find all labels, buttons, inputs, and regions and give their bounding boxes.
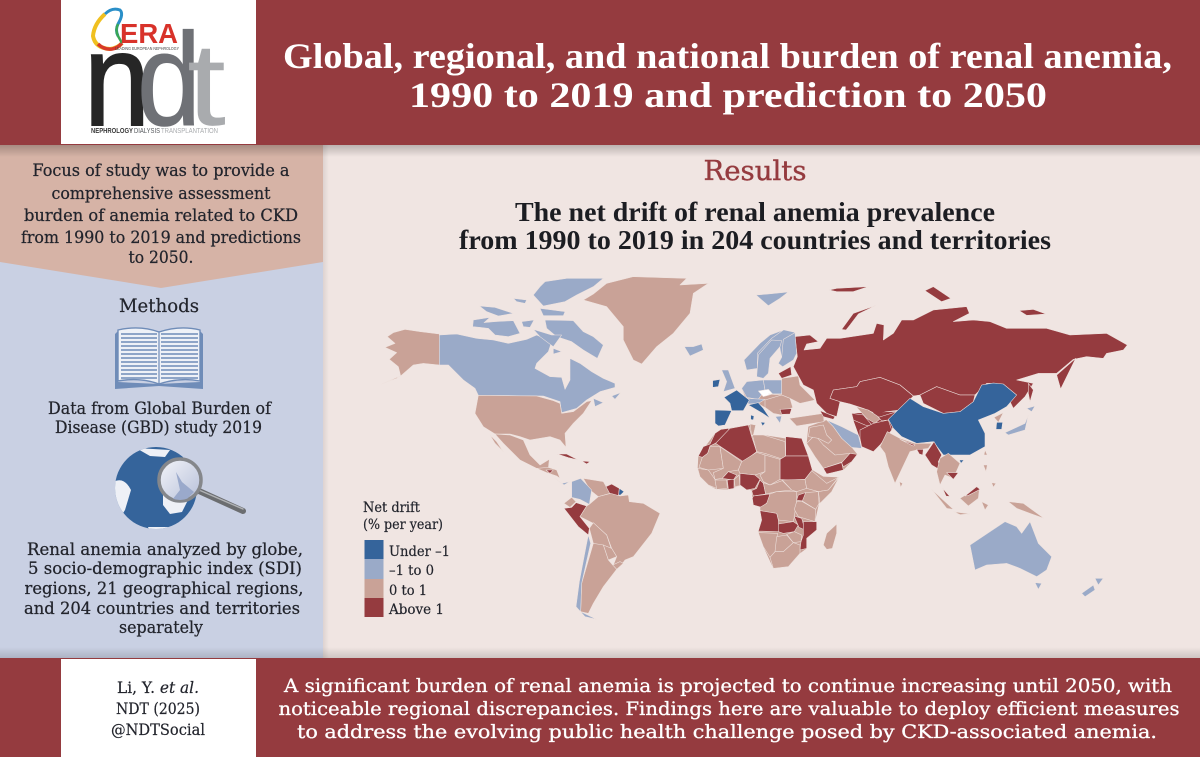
New Zealand bbox=[1082, 585, 1095, 597]
text: data source bbox=[48, 399, 273, 438]
logo: ERA NDT: t bbox=[187, 19, 226, 151]
heading: results: Results bbox=[704, 156, 806, 187]
choropleth map: Africa and Middle East bbox=[698, 420, 862, 568]
logo: ERA NDT: DIALYSIS bbox=[134, 128, 160, 135]
citation box bbox=[61, 659, 256, 757]
Kamchatka bbox=[1057, 358, 1076, 389]
choropleth map: southern and eastern Asia bbox=[852, 383, 1044, 518]
footer banner: A significant burden of renal anemia is projected to continue increasing until 2050, with bbox=[283, 675, 1172, 697]
Sumatra bbox=[932, 489, 953, 509]
icon: globe with magnifier bbox=[113, 447, 243, 532]
choropleth map: Central and South America, Greenland bbox=[475, 277, 708, 619]
Chile bbox=[576, 535, 597, 619]
Arctic islands bbox=[473, 317, 520, 337]
Czechia bbox=[758, 389, 773, 397]
Arabia base bbox=[807, 420, 857, 474]
South Africa bbox=[770, 543, 800, 568]
Borneo bbox=[960, 488, 979, 506]
Iran bbox=[827, 420, 862, 448]
Argentina bbox=[581, 543, 617, 613]
Bangladesh bbox=[917, 449, 923, 455]
choropleth map: North America bbox=[382, 278, 621, 413]
Zimbabwe bbox=[787, 532, 802, 543]
citation box: @NDTSocial bbox=[111, 720, 205, 739]
Hainan bbox=[959, 460, 964, 463]
text: analysis scope: separately bbox=[119, 618, 203, 638]
Ghana bbox=[727, 479, 734, 489]
Chad bbox=[760, 455, 780, 485]
Canada bbox=[439, 334, 615, 413]
Russia bbox=[793, 307, 1127, 417]
Belarus and Ukraine bbox=[768, 376, 815, 403]
Central America bbox=[537, 467, 560, 478]
text: data source: Data from Global Burden of bbox=[48, 399, 273, 419]
China bbox=[888, 383, 1017, 455]
panel: study focus bbox=[0, 145, 323, 288]
logo: ERA NDT: ERA bbox=[120, 18, 178, 49]
Uganda bbox=[797, 493, 806, 501]
chart title bbox=[459, 197, 1051, 255]
Mexico bbox=[495, 434, 549, 468]
Afghanistan and Pakistan bbox=[860, 420, 892, 452]
India bbox=[880, 432, 932, 483]
Paraguay and Uruguay bbox=[603, 545, 617, 560]
Cambodia bbox=[947, 473, 958, 479]
Brazil bbox=[580, 493, 660, 567]
Baltic states bbox=[778, 367, 792, 378]
Russian arctic islands bbox=[842, 305, 876, 330]
Myanmar bbox=[925, 442, 942, 470]
Sakhalin bbox=[1028, 383, 1033, 402]
panel: study focus: burden of anemia related to CKD bbox=[24, 206, 298, 226]
text: analysis scope: 5 socio-demographic index (SDI) bbox=[28, 559, 302, 579]
footer banner bbox=[0, 647, 1200, 757]
Guyana and Suriname bbox=[606, 484, 619, 497]
Iraq and Syria bbox=[808, 425, 832, 443]
Tanzania bbox=[794, 502, 816, 522]
text: analysis scope bbox=[24, 540, 304, 638]
Niger bbox=[738, 452, 765, 475]
logo: ERA NDT: LEADING EUROPEAN NEPHROLOGY bbox=[115, 46, 179, 51]
Balkans bbox=[765, 395, 793, 415]
choropleth map: Europe bbox=[713, 330, 835, 426]
Australia bbox=[970, 522, 1052, 577]
Saudi Arabia bbox=[807, 435, 850, 468]
panel: study focus: Focus of study was to provide a bbox=[32, 161, 290, 181]
Kenya bbox=[802, 492, 819, 509]
header banner: 1990 to 2019 and prediction to 2050 bbox=[409, 75, 1047, 115]
Norway bbox=[744, 330, 783, 370]
map legend: Under –1 bbox=[389, 544, 450, 560]
Yemen bbox=[823, 463, 843, 474]
logo: ERA NDT: d bbox=[137, 6, 201, 153]
New Guinea bbox=[1008, 502, 1044, 518]
North Korea bbox=[994, 413, 1003, 422]
Ivory Coast bbox=[715, 480, 727, 489]
map legend: Above 1 bbox=[388, 602, 444, 618]
Caribbean bbox=[557, 454, 578, 460]
panel: study focus: to 2050. bbox=[128, 248, 194, 268]
Bulgaria bbox=[780, 409, 792, 414]
header banner: Global, regional, and national burden of renal anemia, bbox=[283, 36, 1172, 76]
Namibia bbox=[758, 533, 778, 557]
Oman bbox=[842, 453, 857, 467]
citation box: Li, Y. et al. bbox=[117, 678, 199, 697]
footer banner: noticeable regional discrepancies. Findings here are valuable to deploy efficient measures bbox=[278, 698, 1180, 720]
United States bbox=[475, 395, 592, 447]
Philippines bbox=[983, 465, 987, 472]
Mozambique bbox=[800, 522, 817, 550]
Peru bbox=[564, 503, 589, 535]
text: analysis scope: regions, 21 geographical regions, bbox=[24, 579, 304, 599]
South Sudan bbox=[782, 479, 807, 492]
Sweden bbox=[757, 340, 782, 378]
Somalia bbox=[818, 477, 839, 503]
France bbox=[724, 390, 749, 411]
Nepal bbox=[900, 439, 915, 446]
text: analysis scope: and 204 countries and territories bbox=[24, 599, 300, 619]
Uzbekistan bbox=[856, 407, 881, 423]
United Kingdom bbox=[722, 370, 735, 392]
Indochina bbox=[937, 453, 960, 485]
icon: open book bbox=[115, 328, 203, 389]
Malay peninsula bbox=[943, 488, 950, 497]
Finland bbox=[778, 333, 797, 367]
Greenland bbox=[583, 277, 708, 364]
Egypt bbox=[786, 437, 808, 456]
Sudan bbox=[780, 456, 812, 480]
chart title: from 1990 to 2019 in 204 countries and territories bbox=[459, 225, 1051, 255]
Central and eastern Europe base bbox=[742, 376, 815, 415]
Caucasus bbox=[820, 411, 835, 419]
footer banner: to address the evolving public health challenge posed by CKD-associated anemia. bbox=[297, 721, 1157, 743]
Bolivia bbox=[589, 523, 612, 550]
Ireland bbox=[713, 379, 720, 387]
Mongolia bbox=[920, 387, 975, 413]
Germany bbox=[742, 380, 765, 399]
logo: ERA NDT: NEPHROLOGY bbox=[91, 128, 133, 135]
heading: methods: Methods bbox=[119, 296, 199, 317]
Libya bbox=[752, 435, 786, 460]
Turkey bbox=[789, 413, 824, 426]
Africa base bbox=[698, 425, 839, 568]
Mauritania bbox=[699, 447, 723, 470]
Alaska bbox=[385, 329, 439, 376]
text: analysis scope: Renal anemia analyzed by globe, bbox=[27, 540, 303, 560]
Morocco and Western Sahara bbox=[698, 428, 730, 457]
panel: study focus: comprehensive assessment bbox=[52, 184, 271, 204]
Poland bbox=[763, 380, 782, 394]
map legend: (% per year) bbox=[363, 517, 443, 533]
Tunisia bbox=[750, 424, 756, 436]
Mali bbox=[713, 447, 742, 479]
Angola bbox=[758, 511, 779, 532]
Switzerland and Austria bbox=[747, 398, 765, 404]
Greece bbox=[775, 416, 782, 423]
Central African Republic bbox=[763, 481, 792, 494]
Colombia bbox=[572, 478, 592, 504]
Sulawesi bbox=[982, 502, 988, 510]
Zambia bbox=[778, 522, 798, 533]
Gabon and Congo bbox=[752, 494, 770, 507]
French Guiana bbox=[619, 488, 624, 495]
DR Congo bbox=[760, 492, 797, 522]
map legend: Net drift bbox=[363, 500, 420, 516]
Central Asia base bbox=[852, 412, 897, 452]
Italy bbox=[748, 403, 770, 426]
choropleth map: Oceania bbox=[970, 522, 1103, 597]
Togo and Benin bbox=[734, 475, 740, 487]
Venezuela, Ecuador and northern South America bbox=[583, 478, 610, 497]
Cameroon bbox=[752, 480, 766, 496]
header banner bbox=[0, 0, 1200, 157]
Algeria bbox=[716, 425, 757, 462]
Scandinavia base bbox=[744, 330, 797, 378]
map legend bbox=[363, 500, 450, 618]
Java bbox=[953, 512, 970, 515]
choropleth map: Russia and northern Asia bbox=[756, 287, 1127, 417]
logo: ERA NDT bbox=[61, 0, 256, 153]
Madagascar bbox=[823, 524, 837, 549]
Spain and Portugal bbox=[715, 410, 732, 426]
logo: ERA NDT: TRANSPLANTATION bbox=[161, 128, 218, 135]
South Korea bbox=[996, 422, 1003, 429]
Botswana bbox=[775, 535, 793, 552]
panel: methods background bbox=[0, 145, 323, 658]
Malawi bbox=[794, 516, 805, 530]
logo: ERA NDT: n bbox=[84, 6, 150, 153]
map legend: –1 to 0 bbox=[389, 563, 434, 579]
Svalbard bbox=[756, 292, 788, 306]
Japan bbox=[1005, 415, 1028, 435]
Burkina Faso bbox=[722, 472, 737, 480]
Taiwan bbox=[984, 450, 987, 455]
Kyrgyzstan and Tajikistan bbox=[878, 412, 897, 421]
map legend: 0 to 1 bbox=[389, 583, 427, 599]
Ethiopia bbox=[805, 471, 838, 492]
Nigeria bbox=[740, 473, 760, 490]
Iceland bbox=[684, 344, 703, 356]
citation box: NDT (2025) bbox=[116, 699, 200, 718]
panel: study focus: from 1990 to 2019 and predictions bbox=[21, 228, 301, 248]
chart title: The net drift of renal anemia prevalence bbox=[515, 197, 995, 227]
text: data source: Disease (GBD) study 2019 bbox=[55, 418, 262, 438]
Senegal and Guinea coast bbox=[698, 468, 717, 488]
Turkmenistan bbox=[852, 413, 873, 427]
Kazakhstan bbox=[830, 377, 913, 414]
